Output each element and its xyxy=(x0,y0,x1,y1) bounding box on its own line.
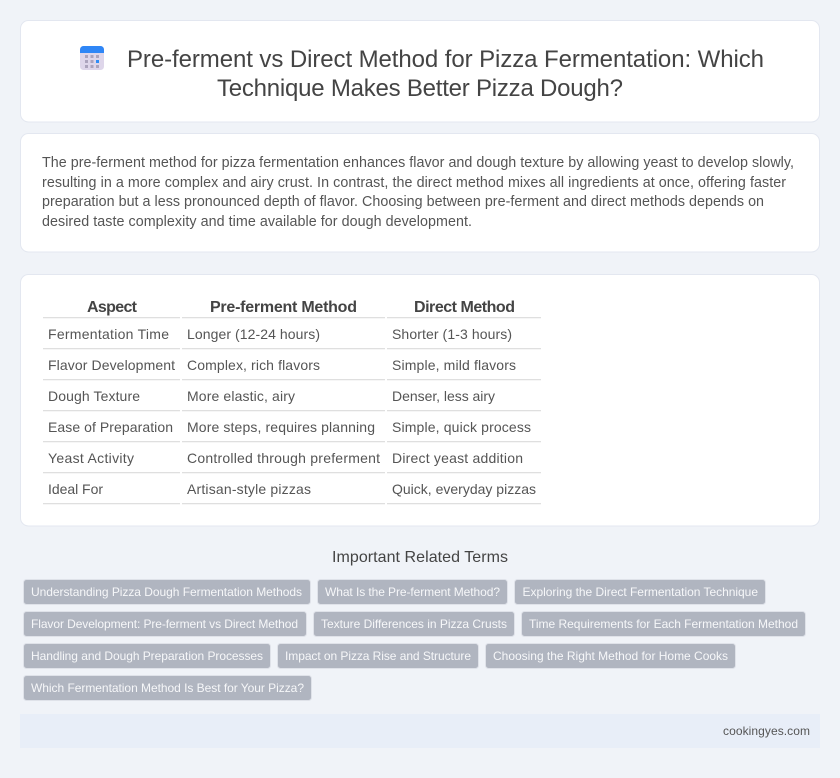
tag xyxy=(318,580,508,604)
panel: related term tags xyxy=(24,580,806,700)
table row: dough texture: Dough Texture xyxy=(48,388,140,404)
tag: Understanding Pizza Dough Fermentation Methods xyxy=(31,585,302,599)
table row: ideal for: Ideal For xyxy=(48,481,103,497)
table row: ease of preparation: Ease of Preparation xyxy=(48,419,173,435)
text block: introduction paragraph: The pre-ferment method for pizza fermentation enhances flavor and dough texture by allowing yeast to develop slowly, xyxy=(42,155,794,171)
tag: Exploring the Direct Fermentation Technique xyxy=(522,585,758,599)
tag xyxy=(278,644,478,668)
title xyxy=(127,46,764,102)
tag xyxy=(514,580,766,604)
panel: title card xyxy=(20,20,820,122)
title: Technique Makes Better Pizza Dough? xyxy=(217,75,623,102)
table row: yeast activity: Yeast Activity xyxy=(48,450,134,466)
table row: ideal for xyxy=(48,481,536,497)
table header: Aspect xyxy=(87,299,138,316)
table header: Direct Method xyxy=(414,299,515,316)
table row: ease of preparation: Simple, quick process xyxy=(392,419,531,435)
table row: flavor development: Complex, rich flavors xyxy=(187,357,320,373)
table row: fermentation time xyxy=(48,326,512,342)
tag: Time Requirements for Each Fermentation Method xyxy=(529,617,798,631)
table row: ideal for: Artisan-style pizzas xyxy=(187,481,311,497)
table row: fermentation time: Shorter (1-3 hours) xyxy=(392,326,512,342)
table row: flavor development xyxy=(48,357,516,373)
panel: comparison table xyxy=(20,274,820,526)
table row: ideal for: Quick, everyday pizzas xyxy=(392,481,536,497)
table row: ease of preparation xyxy=(48,419,531,435)
text block: introduction paragraph xyxy=(42,155,794,230)
text block: introduction paragraph: resulting in a more complex and airy crust. In contrast, the direct method mixes all ingredients at once, offering faster xyxy=(42,175,786,191)
table row: yeast activity: Controlled through preferment xyxy=(187,450,380,466)
tag xyxy=(522,612,806,636)
tag: Choosing the Right Method for Home Cooks xyxy=(493,649,728,663)
footer source text: cookingyes.com xyxy=(723,724,810,738)
table row: flavor development: Flavor Development xyxy=(48,357,175,373)
table header: Pre-ferment Method xyxy=(210,299,357,316)
tag xyxy=(24,612,306,636)
heading: related terms: Important Related Terms xyxy=(332,549,508,566)
tag xyxy=(314,612,514,636)
table row: dough texture: Denser, less airy xyxy=(392,388,495,404)
tag xyxy=(24,580,310,604)
text block: introduction paragraph: preparation but a less pronounced depth of flavor. Choosing between pre-ferment and direct methods depends on xyxy=(42,194,764,210)
title: Pre-ferment vs Direct Method for Pizza Fermentation: Which xyxy=(127,46,764,73)
footer xyxy=(20,714,820,748)
table row: ease of preparation: More steps, requires planning xyxy=(187,419,375,435)
table row: fermentation time: Longer (12-24 hours) xyxy=(187,326,320,342)
tag: What Is the Pre-ferment Method? xyxy=(325,585,500,599)
table header xyxy=(87,299,515,316)
text block: introduction paragraph: desired taste complexity and time available for dough development. xyxy=(42,214,472,230)
panel: introduction xyxy=(20,134,820,252)
icon: calendar xyxy=(80,46,104,70)
table row: yeast activity xyxy=(48,450,523,466)
tag xyxy=(24,644,270,668)
table row: dough texture xyxy=(48,388,495,404)
tag: Texture Differences in Pizza Crusts xyxy=(321,617,507,631)
table row: dough texture: More elastic, airy xyxy=(187,388,295,404)
tag: Flavor Development: Pre-ferment vs Direct Method xyxy=(31,617,298,631)
tag: Which Fermentation Method Is Best for Your Pizza? xyxy=(31,681,304,695)
tag xyxy=(24,676,312,700)
tag xyxy=(486,644,736,668)
tag: Impact on Pizza Rise and Structure xyxy=(285,649,471,663)
table row: yeast activity: Direct yeast addition xyxy=(392,450,523,466)
table row: flavor development: Simple, mild flavors xyxy=(392,357,516,373)
table row: fermentation time: Fermentation Time xyxy=(48,326,169,342)
tag: Handling and Dough Preparation Processes xyxy=(31,649,263,663)
